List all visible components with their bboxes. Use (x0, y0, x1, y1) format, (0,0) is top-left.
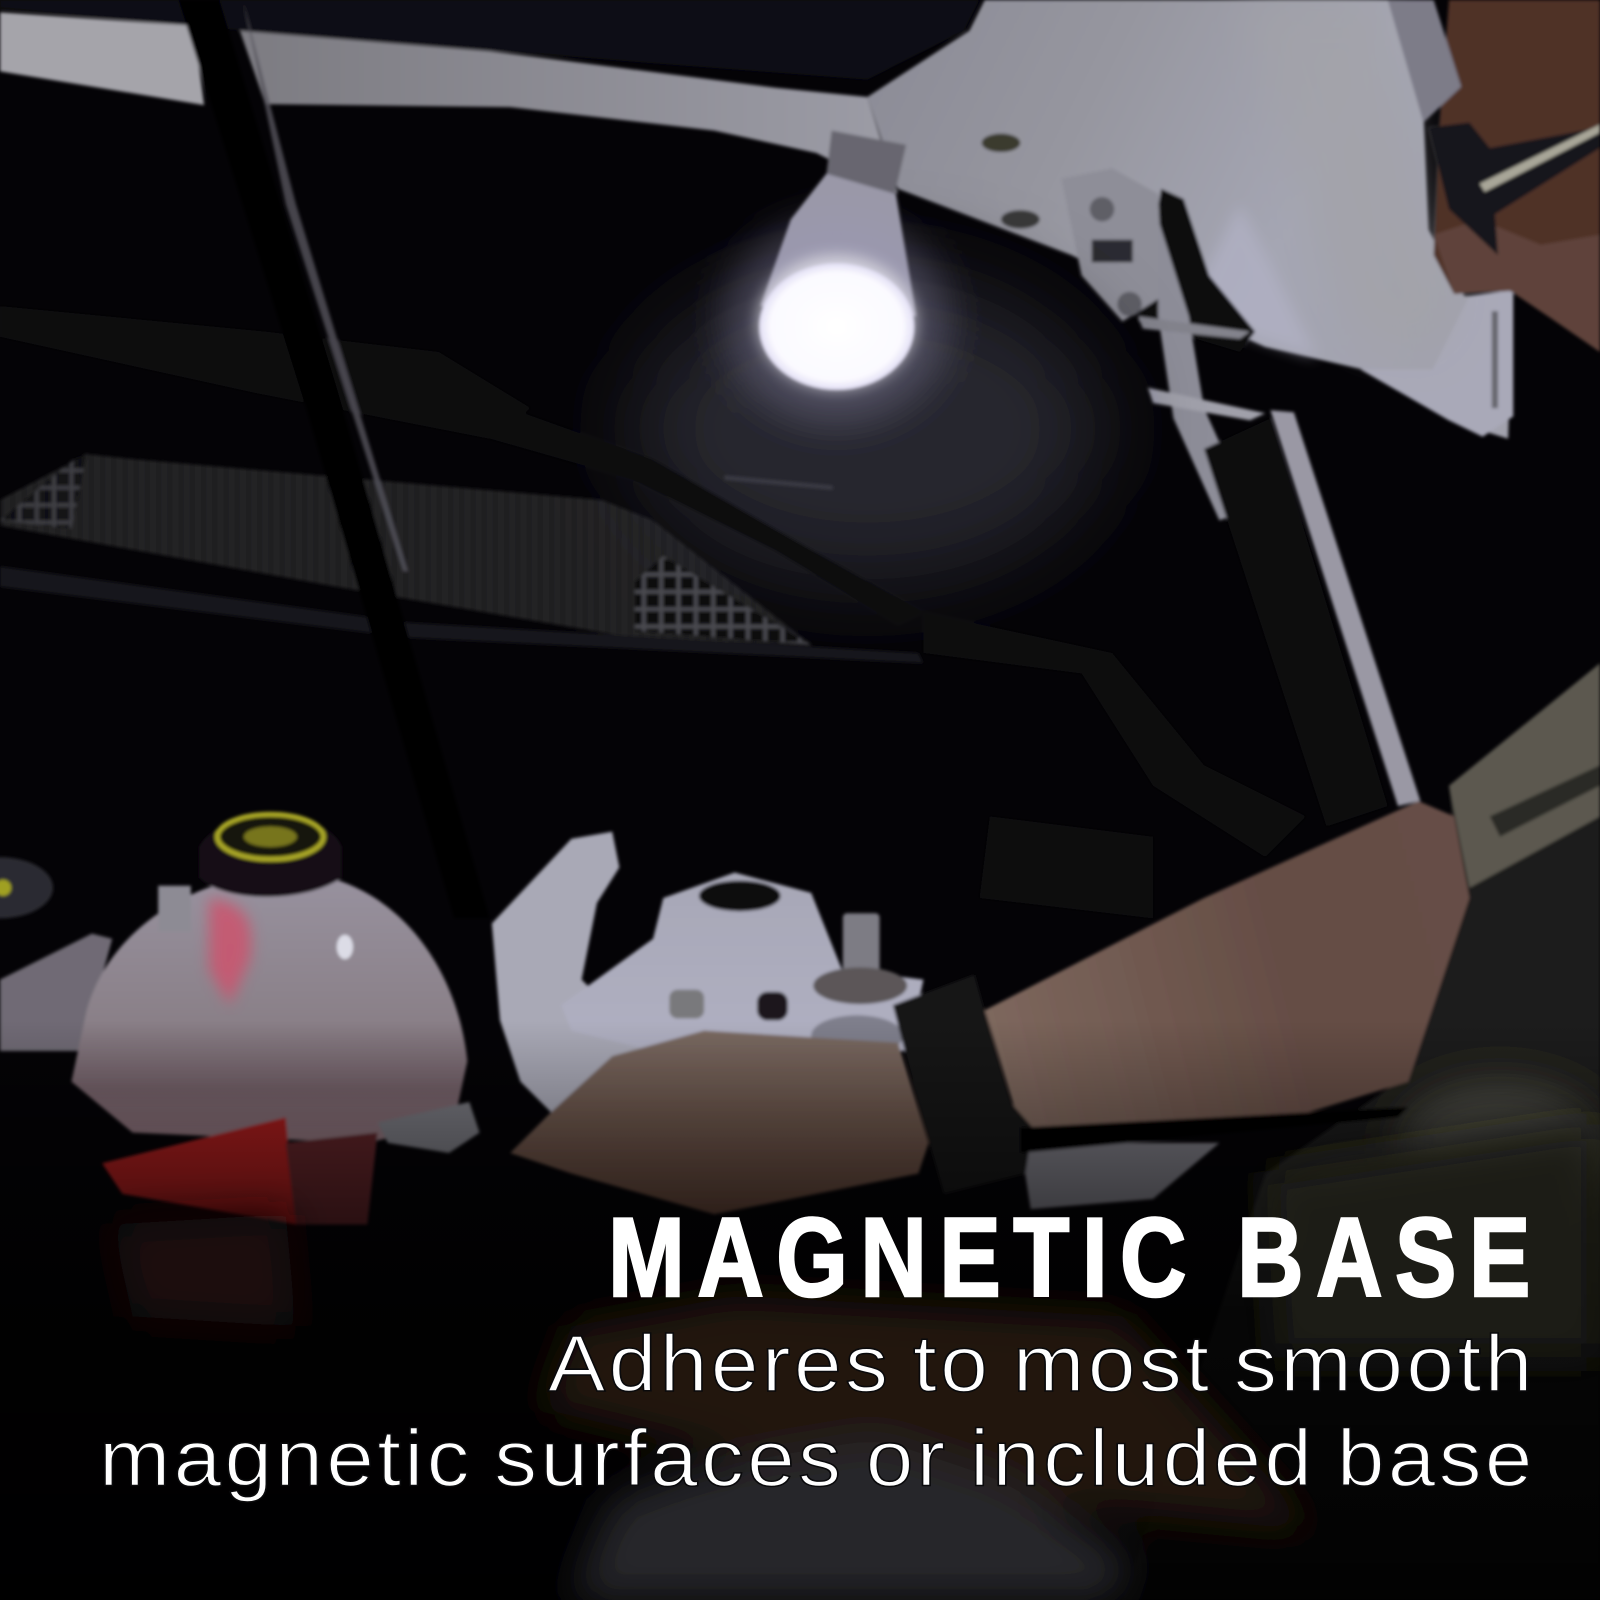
bottom photo fade (0, 1020, 1600, 1600)
cowl grille (0, 306, 1306, 918)
description text: Adheres to most smooth (548, 1319, 1536, 1408)
arm, watch and hand (510, 801, 1469, 1214)
hood strut (179, 0, 490, 918)
hood holes (982, 134, 1020, 152)
white tower lower part beneath the wrist (1020, 1143, 1219, 1209)
dark windshield shape at top (0, 0, 980, 80)
hood latch bracket (1061, 168, 1163, 321)
coolant reservoir (0, 814, 480, 1224)
hood underside panel (0, 0, 1513, 520)
man's face and glasses (1388, 0, 1600, 352)
glow behind light on inner wall (633, 276, 1102, 582)
hood lit highlight (1240, 0, 1459, 352)
strut tower (492, 832, 923, 1112)
white seal strip at right (1204, 418, 1388, 827)
hood flange (1360, 290, 1513, 437)
description text (99, 1319, 1536, 1503)
description text: magnetic surfaces or included base (99, 1414, 1536, 1503)
work light bulb (724, 131, 949, 423)
dim shapes under text (112, 1122, 1600, 1600)
right sleeve and torso (1122, 663, 1600, 1600)
dark notch around latch (1138, 189, 1255, 352)
